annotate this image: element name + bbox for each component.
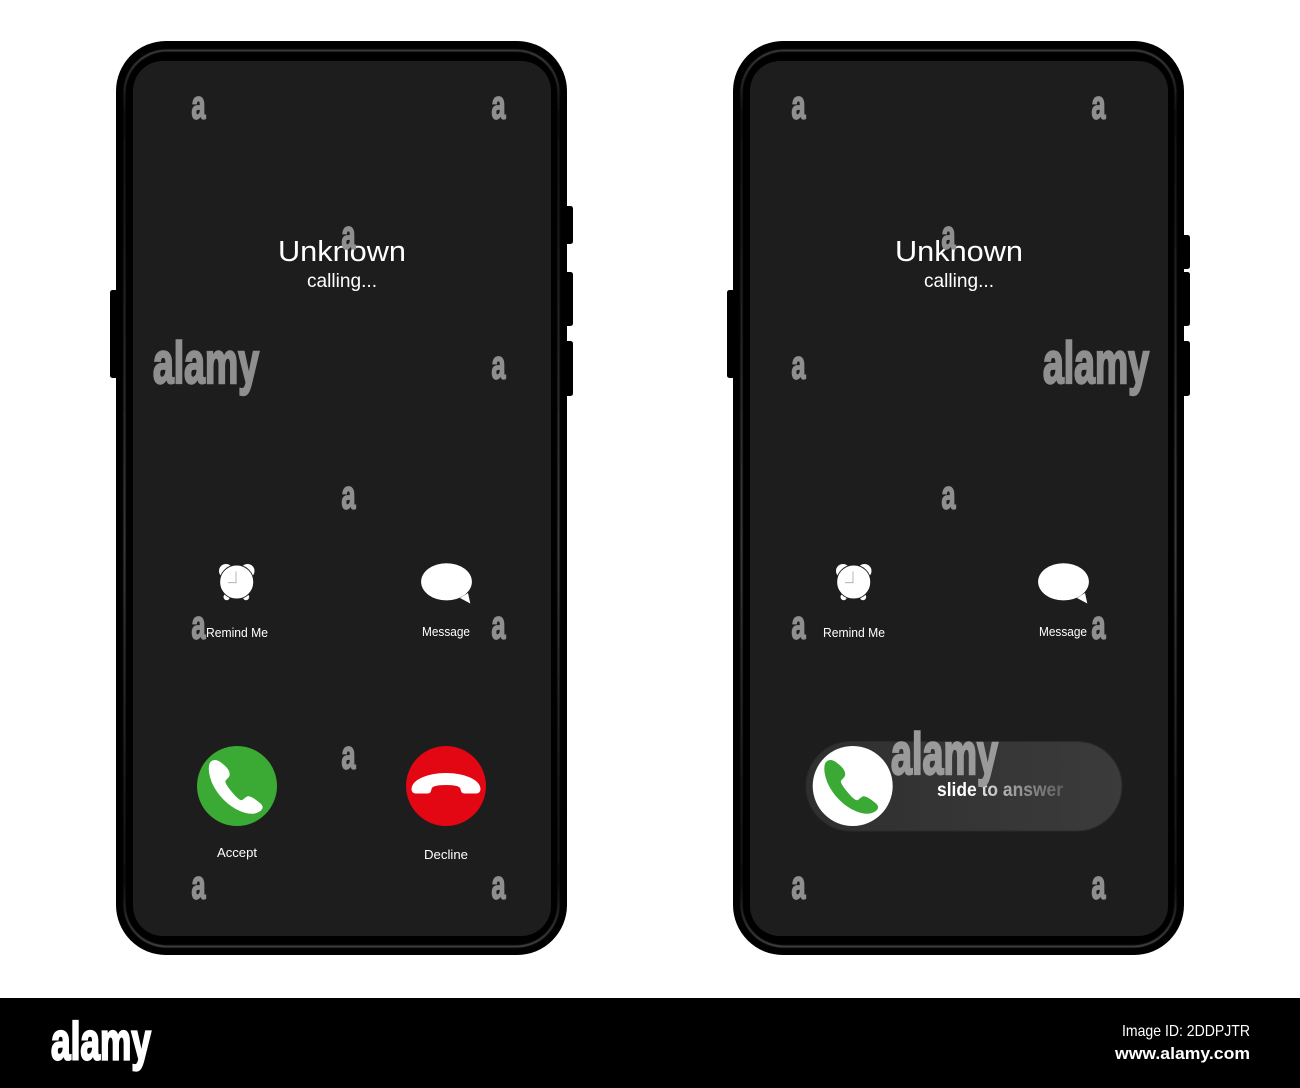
watermarks: a — [942, 214, 956, 258]
watermarks: a — [492, 344, 506, 388]
watermarks: alamy — [153, 331, 259, 396]
watermarks — [153, 84, 1149, 908]
button: accept — [197, 746, 277, 826]
watermarks: a — [792, 604, 806, 648]
watermarks: a — [1092, 604, 1106, 648]
watermarks: a — [792, 864, 806, 908]
phone screen — [750, 61, 1168, 936]
calling status: calling... — [924, 270, 994, 292]
watermarks: a — [342, 734, 356, 778]
watermarks: a — [942, 474, 956, 518]
watermarks: a — [492, 604, 506, 648]
watermarks: a — [1092, 84, 1106, 128]
label: decline: Decline — [424, 847, 468, 862]
watermarks: a — [492, 84, 506, 128]
watermarks: a — [492, 864, 506, 908]
phone body — [116, 41, 567, 955]
watermarks: alamy — [891, 722, 998, 787]
side buttons — [727, 235, 1190, 396]
panel: phone with slide to answer — [727, 41, 1190, 955]
watermarks: a — [1092, 864, 1106, 908]
side buttons — [110, 206, 573, 396]
watermarks: alamy — [1043, 331, 1149, 396]
image id: Image ID: 2DDPJTR — [1122, 1023, 1250, 1040]
icon: message bubble — [1038, 563, 1089, 604]
label: remind me: Remind Me — [823, 626, 885, 640]
phone body — [733, 41, 1184, 955]
phone edge highlight — [742, 50, 1176, 946]
caller name: Unknown — [895, 236, 1023, 268]
watermarks: a — [192, 864, 206, 908]
phone screen — [133, 61, 551, 936]
label: message: Message — [1039, 625, 1087, 639]
calling status: calling... — [307, 270, 377, 292]
watermarks: a — [792, 84, 806, 128]
footer logo: alamy — [51, 1012, 151, 1072]
watermarks: a — [342, 214, 356, 258]
slider track — [806, 742, 1122, 831]
label: remind me: Remind Me — [206, 626, 268, 640]
panel: phone with accept and decline buttons — [110, 41, 573, 955]
icon: alarm clock — [219, 564, 254, 600]
watermarks: a — [342, 474, 356, 518]
slider knob with phone icon — [813, 746, 893, 826]
footer bar — [0, 998, 1300, 1088]
button: decline — [406, 746, 486, 826]
website: www.alamy.com — [1114, 1044, 1250, 1063]
watermarks: a — [192, 604, 206, 648]
watermarks: a — [192, 84, 206, 128]
slider label: slide to answer — [937, 780, 1064, 801]
label: message: Message — [422, 625, 470, 639]
phone edge highlight — [124, 50, 558, 946]
caller name: Unknown — [278, 236, 406, 268]
label: accept: Accept — [217, 845, 257, 860]
icon: message bubble — [421, 563, 472, 604]
watermarks: a — [792, 344, 806, 388]
icon: alarm clock — [836, 564, 872, 600]
